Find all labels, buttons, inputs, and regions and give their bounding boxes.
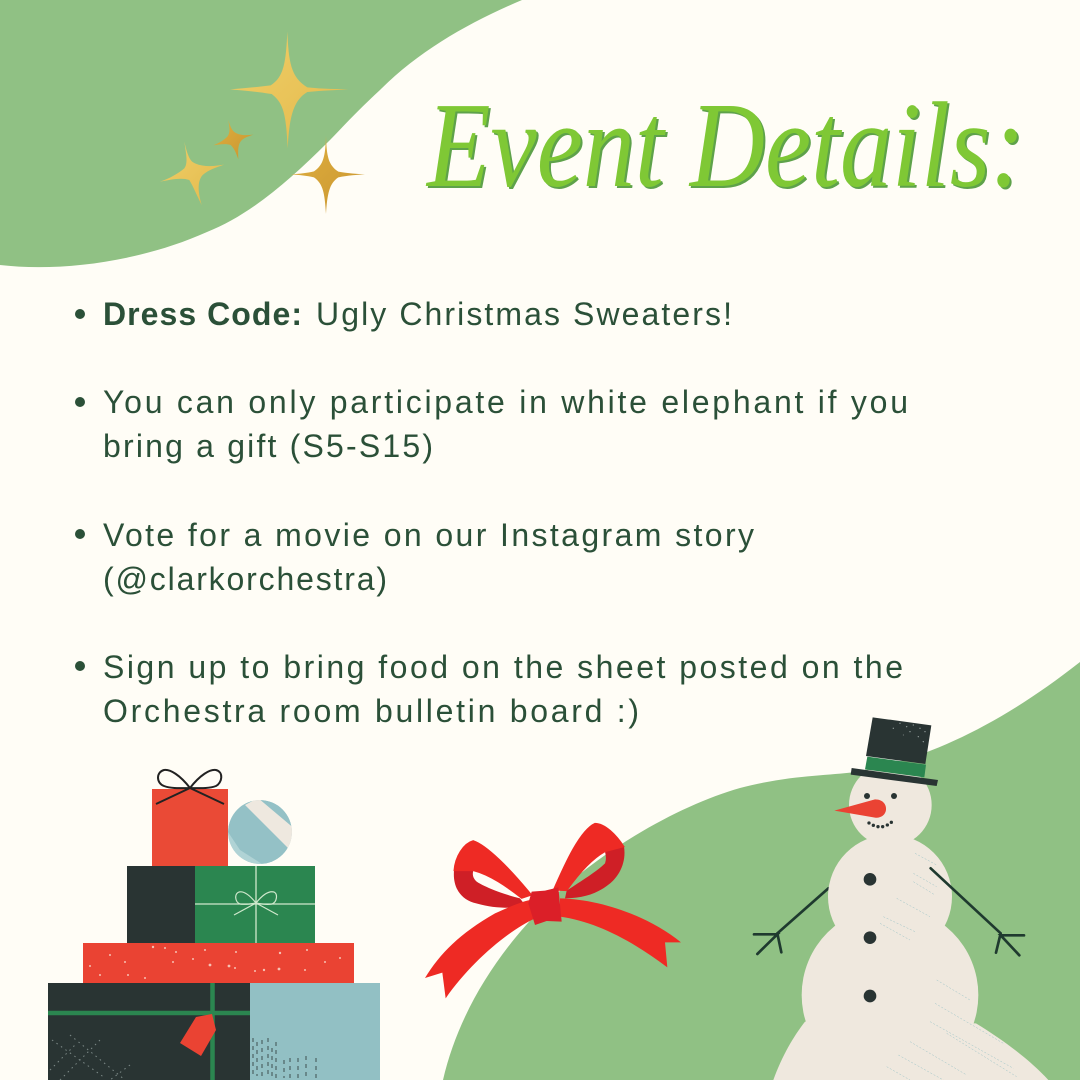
stack of gifts	[48, 770, 380, 1080]
bullet list	[75, 296, 908, 729]
snowman: buttons	[864, 873, 876, 1002]
bow: knot	[528, 887, 562, 925]
snowman: body	[773, 764, 1048, 1080]
bullet: movie vote: Vote for a movie on our Instagram story	[103, 517, 754, 553]
gold sparkles	[160, 32, 365, 214]
bullet: white elephant: You can only participate in white elephant if you	[103, 384, 908, 420]
bullet: food sign up: Orchestra room bulletin board :)	[103, 693, 639, 729]
ornament ball	[228, 798, 296, 864]
bow: tails	[425, 900, 535, 998]
bullet: dress code: Dress Code:	[103, 296, 302, 332]
gift: large blue box	[250, 983, 380, 1080]
bullet: dress code	[75, 296, 732, 332]
green wave: top left	[0, 0, 522, 267]
bullet: white elephant	[75, 384, 908, 464]
snowman: far arm	[754, 888, 828, 954]
bow: upper loops	[454, 841, 532, 898]
snowman: near arm	[931, 868, 1024, 955]
snowman: face	[834, 793, 897, 828]
bullet: food sign up	[75, 649, 903, 729]
bullet: movie vote	[75, 517, 754, 597]
snowman	[754, 717, 1048, 1080]
bullet: dress code: Ugly Christmas Sweaters!	[316, 296, 732, 332]
green wave: bottom right	[443, 662, 1080, 1080]
bullet: white elephant: bring a gift (S5-S15)	[103, 428, 433, 464]
gift: large dark box with ribbon and tag	[48, 983, 250, 1080]
bullet: food sign up: Sign up to bring food on the sheet posted on the	[103, 649, 903, 685]
snowman: top hat	[851, 717, 938, 786]
bow: dark inner loops	[454, 871, 525, 908]
gift tag	[180, 1014, 216, 1056]
bullet: movie vote: (@clarkorchestra)	[103, 561, 387, 597]
red ribbon bow	[425, 823, 681, 998]
gift: flat red box with speckles	[83, 943, 354, 983]
gift: green box with ribbon	[195, 866, 315, 943]
gift: dark box	[127, 866, 195, 943]
gift: top red box with bow	[152, 770, 228, 866]
